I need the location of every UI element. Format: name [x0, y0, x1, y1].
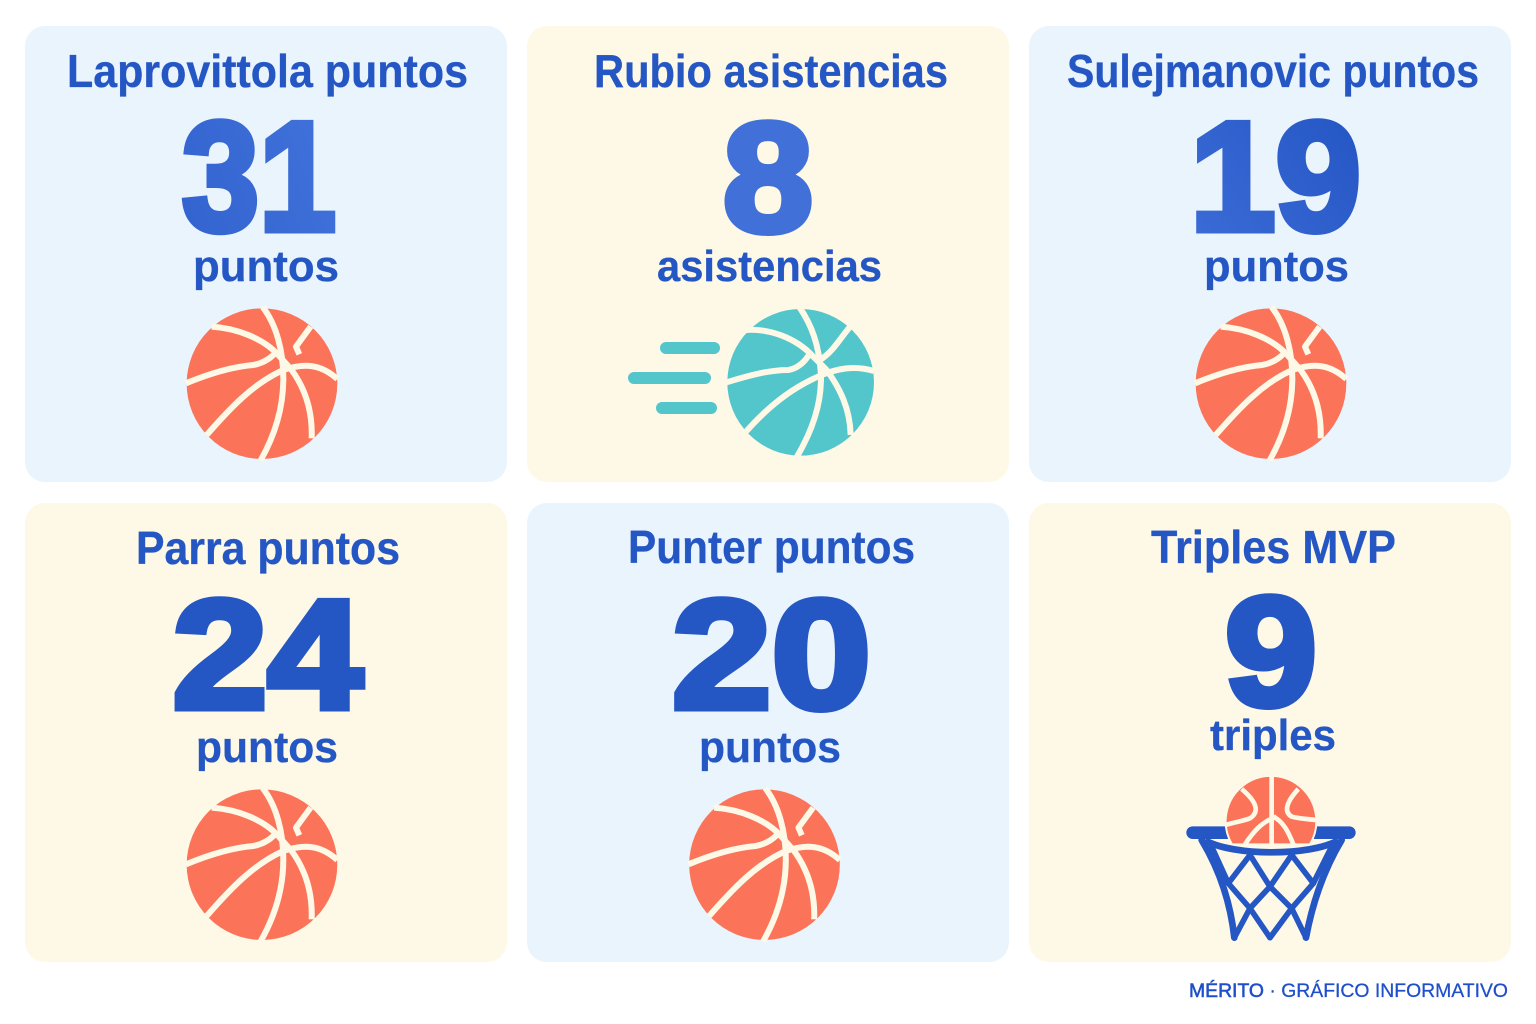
orange ball: [1226, 776, 1316, 844]
heading: Laprovittola puntos: Laprovittola puntos: [67, 45, 468, 97]
unit: puntos: puntos: [196, 723, 338, 772]
number: 20: 20: [672, 568, 871, 741]
icon: basketball: [186, 788, 337, 941]
rim front: [1205, 840, 1338, 852]
number: 8: 8: [723, 91, 813, 264]
panel: Laprovittola puntos: [25, 26, 507, 482]
panel: Parra puntos: [25, 503, 507, 962]
icon: ball in hoop: [1193, 776, 1349, 938]
rim back: [1193, 814, 1349, 852]
icon: basketball: [1195, 307, 1346, 460]
unit: puntos: puntos: [193, 242, 339, 291]
motion lines: [628, 342, 720, 414]
panel: Punter puntos: [527, 503, 1009, 962]
number: 9: 9: [1225, 565, 1317, 738]
number: 31: 31: [182, 90, 336, 263]
icon: basketball: [688, 788, 840, 941]
teal basketball: [727, 307, 874, 457]
icon: basketball: [186, 307, 337, 460]
panel: Triples MVP: [1029, 503, 1511, 962]
number: 19: 19: [1190, 90, 1361, 263]
unit: asistencias: asistencias: [657, 242, 882, 291]
number: 24: 24: [172, 568, 362, 741]
footer credit: MÉRITO · GRÁFICO INFORMATIVO: [1189, 981, 1508, 1002]
heading: Rubio asistencias: Rubio asistencias: [594, 45, 948, 97]
net: [1202, 840, 1342, 938]
panel: Rubio asistencias: [527, 26, 1009, 482]
heading: Triples MVP: Triples MVP: [1151, 521, 1396, 573]
heading: Parra puntos: Parra puntos: [136, 522, 400, 574]
heading: Punter puntos: Punter puntos: [628, 521, 915, 573]
heading: Sulejmanovic puntos: Sulejmanovic puntos: [1067, 45, 1479, 97]
icon: moving basketball: [628, 307, 874, 457]
panel: Sulejmanovic puntos: [1029, 26, 1511, 482]
unit: triples: triples: [1210, 711, 1336, 760]
unit: puntos: puntos: [1204, 242, 1349, 291]
unit: puntos: puntos: [699, 723, 841, 772]
